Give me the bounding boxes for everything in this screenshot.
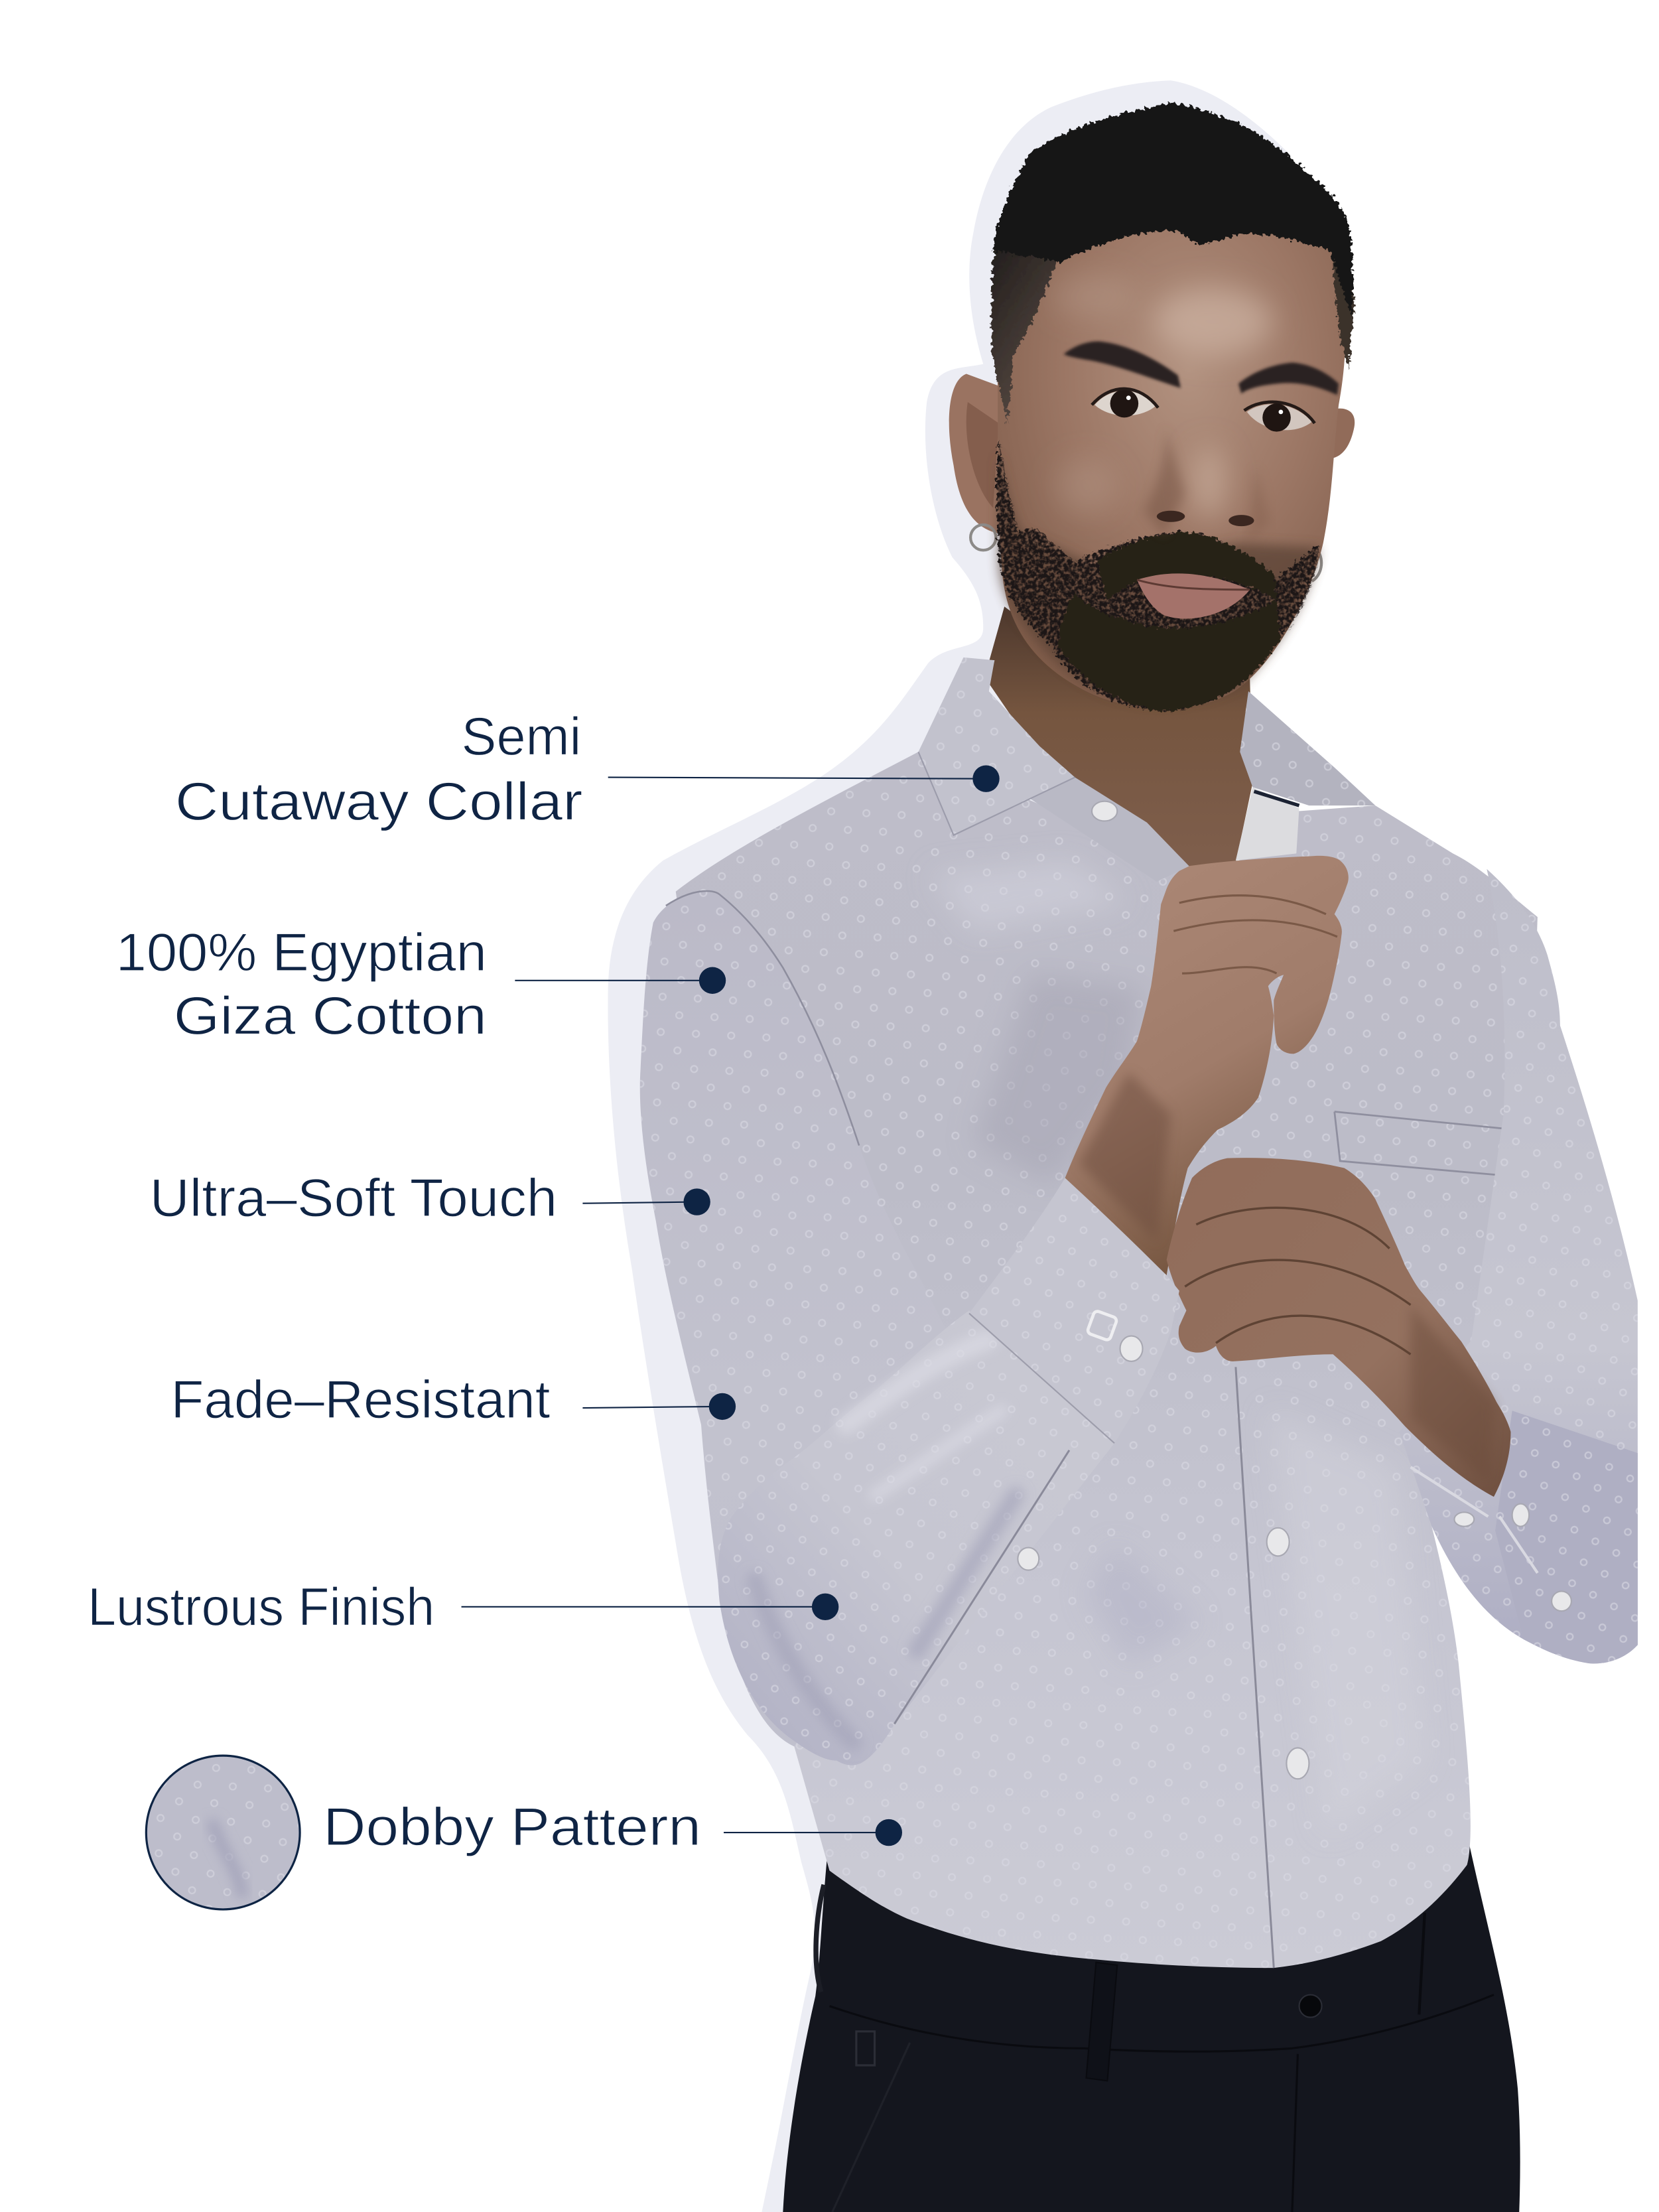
hair fade <box>992 233 1114 423</box>
trousers <box>783 1834 1520 2212</box>
raised hand and wrist <box>1065 856 1349 1275</box>
forehead and nose highlights <box>1051 273 1272 519</box>
button placket <box>1236 1367 1274 1968</box>
feature label: 100% Egyptian Giza Cotton <box>116 923 726 1046</box>
feature label: Lustrous Finish: Lustrous Finish <box>88 1577 434 1637</box>
fingers <box>1173 896 1337 973</box>
armhole seam <box>666 891 859 1146</box>
right sleeve <box>1400 869 1638 1663</box>
shirt <box>640 752 1638 1968</box>
feature label: Dobby Pattern: Dobby Pattern <box>323 1797 701 1857</box>
lips <box>1137 573 1250 618</box>
right cuff <box>1495 1411 1638 1663</box>
chest pocket <box>1335 1112 1504 1175</box>
feature label: Semi Cutaway Collar <box>175 707 1000 831</box>
eyebrows <box>1063 342 1339 395</box>
lower hand <box>1167 1158 1510 1497</box>
feature label: Dobby Pattern <box>323 1797 902 1857</box>
feature label: 100% Egyptian Giza Cotton: Giza Cotton <box>174 987 487 1046</box>
fabric swatch <box>145 1754 301 1911</box>
beard: mustache and chin <box>1058 532 1281 711</box>
left cuff <box>969 1178 1179 1443</box>
feature label: Semi Cutaway Collar: Cutaway Collar <box>175 772 582 831</box>
left upper sleeve <box>640 892 988 1746</box>
neck <box>984 606 1252 872</box>
feature label: 100% Egyptian Giza Cotton: 100% Egyptian <box>116 923 487 983</box>
feature label: Semi Cutaway Collar: Semi <box>462 707 581 767</box>
feature label: Lustrous Finish <box>88 1577 838 1637</box>
cheek beard stubble <box>996 437 1319 711</box>
hair <box>992 103 1353 317</box>
sleeve folds <box>755 1340 1016 1742</box>
nose <box>1144 423 1270 543</box>
sleeve button <box>1018 1548 1039 1570</box>
torso <box>676 752 1538 1968</box>
right cuff buttons <box>1454 1504 1571 1611</box>
feature label: Fade-Resistant: Fade–Resistant <box>171 1370 550 1430</box>
ears <box>949 374 1355 581</box>
beard shadow <box>999 451 1319 703</box>
feature label: Ultra-Soft Touch: Ultra–Soft Touch <box>150 1168 557 1228</box>
feature label: Fade-Resistant <box>171 1370 736 1430</box>
collar <box>918 657 1375 882</box>
face <box>998 212 1345 709</box>
left forearm sleeve <box>718 1310 1114 1765</box>
background halo silhouette <box>608 80 1291 2212</box>
torso shadows <box>931 861 1425 1834</box>
hair right fade <box>1330 240 1354 370</box>
collar button <box>1092 801 1117 821</box>
eyes <box>1092 389 1315 432</box>
torso buttons <box>1267 1528 1309 1779</box>
